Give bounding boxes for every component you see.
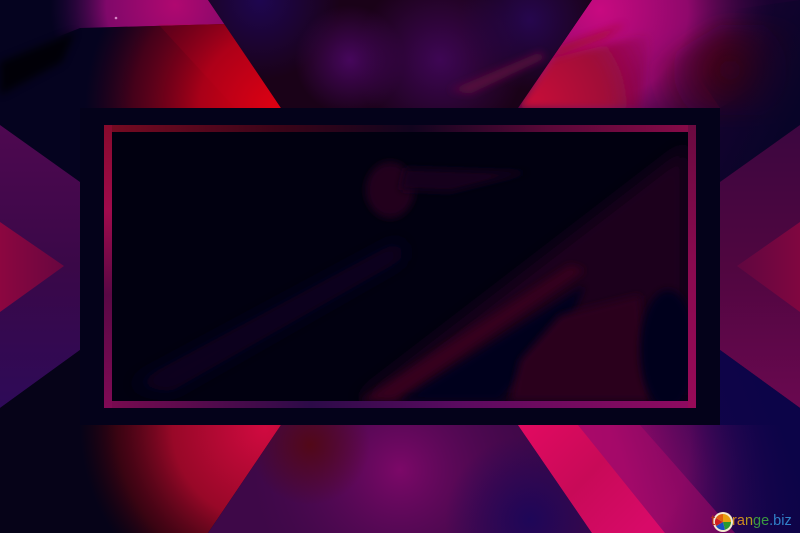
panel: bottom-left wedge [0,350,281,533]
icon: watermark colour wheel [713,512,733,532]
panel: top-right wedge [518,0,800,182]
panel: outer dark frame [80,108,720,425]
panel: bottom-right wedge [518,350,800,533]
panel: inner dark content [112,132,696,410]
arrow: right inner chevron [737,222,800,312]
panel: right arrow shape [720,125,800,408]
panel: bottom-center wedge [208,425,592,533]
watermark: tOrange.biz: t range.biz [711,513,792,529]
panel: magenta frame [104,125,696,408]
panel: left arrow shape [0,125,80,408]
arrow: left inner chevron [0,222,64,312]
panel: top-left wedge [0,0,281,182]
panel: top-center wedge [208,0,592,108]
icon: star speck [115,17,117,19]
